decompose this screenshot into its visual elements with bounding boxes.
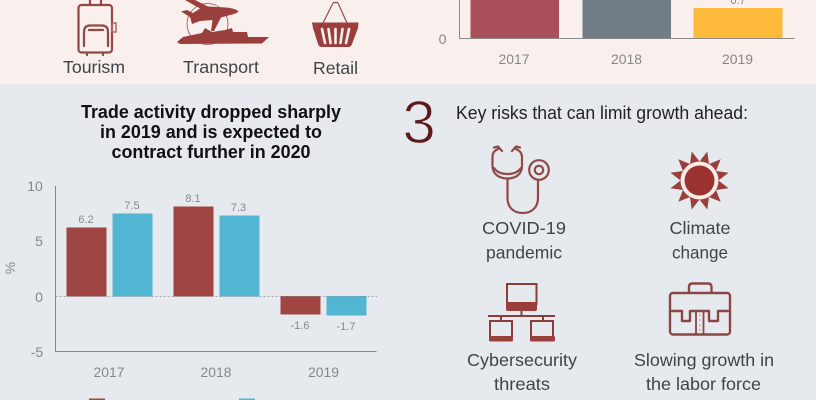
label: climate change: change (672, 242, 728, 262)
heading: trade activity: in 2019 and is expected to (100, 122, 322, 142)
chart: trade activity bars: 2018 (200, 364, 232, 380)
chart: trade activity bars: 10 (27, 178, 43, 194)
label: cybersecurity threats: threats (494, 374, 550, 394)
chart: trade activity bars (2, 178, 377, 380)
legend swatch: blue (239, 398, 255, 400)
bar: 2018 (582, 0, 671, 38)
heading: trade activity: Trade activity dropped sharply (81, 102, 341, 122)
icon: retail basket (312, 2, 358, 47)
chart: trade activity bars: 6.2 (78, 214, 94, 226)
icon: climate sun (670, 152, 728, 210)
label: covid-19 pandemic (482, 218, 566, 262)
label: slowing growth (634, 350, 774, 394)
chart: top right bar chart (439, 0, 794, 67)
bar: 2019 (694, 8, 782, 38)
section number 3: 3 (402, 89, 436, 156)
bottom panel background (0, 84, 816, 400)
chart: trade activity bars: 8.1 (185, 193, 201, 205)
axis label: 2019: 2019 (722, 51, 753, 67)
label: retail: Retail (313, 58, 358, 78)
chart: trade activity bars: % (2, 262, 18, 274)
label: covid-19 pandemic: COVID-19 (482, 218, 566, 238)
heading: key risks: Key risks that can limit growth ahead: (456, 103, 748, 123)
icon: stethoscope (492, 146, 549, 213)
chart: trade activity bars: 2017 (94, 364, 125, 380)
chart: trade activity bars: -1.7 (337, 321, 355, 333)
icon: briefcase (670, 284, 730, 334)
axis label: 0: 0 (439, 31, 447, 47)
axis label: 2018: 2018 (611, 51, 642, 67)
label: tourism: Tourism (63, 57, 125, 77)
icon: network computers (488, 284, 555, 342)
icon: tourism suitcase (78, 0, 116, 55)
legend swatch: red (89, 398, 105, 400)
label: cybersecurity threats (467, 350, 577, 394)
chart: trade activity bars: 7.5 (124, 200, 140, 212)
label: climate change (670, 218, 730, 262)
label: slowing growth: Slowing growth in (634, 350, 774, 370)
label: slowing growth: the labor force (646, 374, 761, 394)
label: transport: Transport (183, 57, 259, 77)
axis label: 2017: 2017 (498, 51, 530, 67)
chart: trade activity bars: 2019 (308, 364, 339, 380)
label: covid-19 pandemic: pandemic (486, 242, 562, 262)
top panel background (0, 0, 816, 84)
chart: trade activity bars: -1.6 (291, 320, 309, 332)
chart: trade activity bars: 5 (35, 233, 43, 249)
label: cybersecurity threats: Cybersecurity (467, 350, 577, 370)
heading: trade activity (81, 102, 341, 162)
chart: trade activity bars: 7.3 (231, 202, 246, 214)
heading: trade activity: contract further in 2020 (112, 142, 310, 162)
icon: transport plane and ship (177, 0, 269, 44)
bar: 2017 (470, 0, 559, 38)
label: climate change: Climate (670, 218, 730, 238)
chart: trade activity bars: 0 (35, 289, 43, 305)
chart: trade activity bars: -5 (31, 344, 43, 360)
